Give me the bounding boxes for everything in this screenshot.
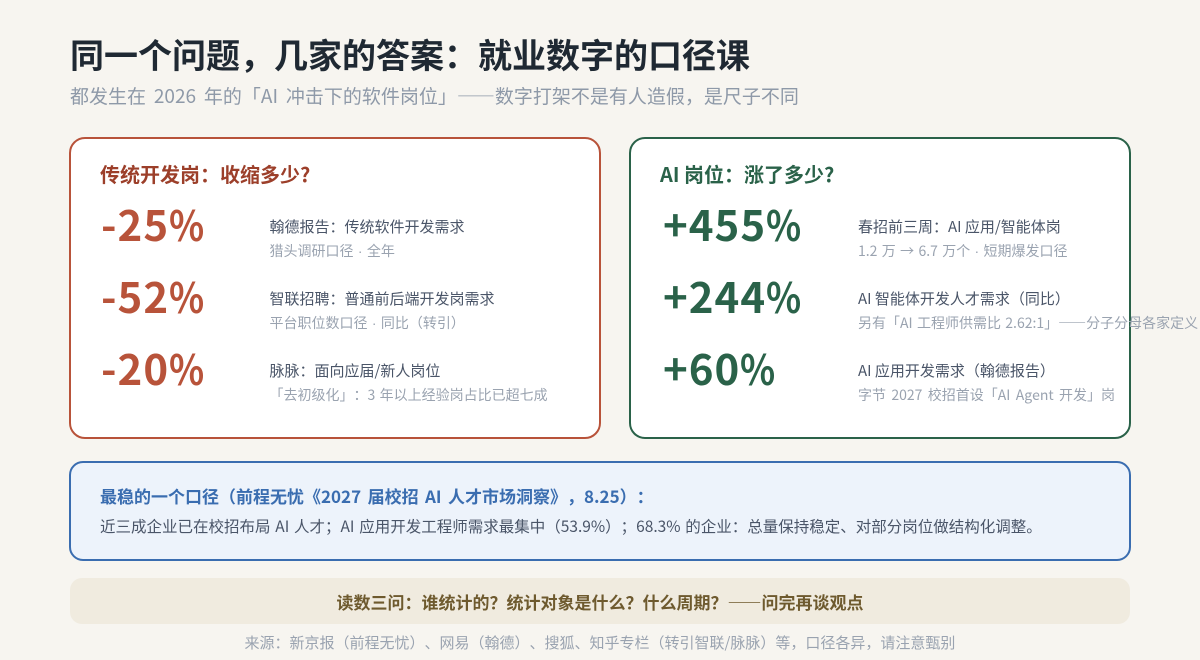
panel heading: traditional: 传统开发岗：收缩多少? (100, 158, 310, 188)
callout: most stable figure (69, 461, 1131, 561)
stat: +455%: +455 (663, 193, 766, 254)
stat: -25%: -25 (101, 193, 169, 254)
note: Maimai: 「去初级化」：3 年以上经验岗占比已超七成 (270, 385, 548, 405)
title: 同一个问题，几家的答案：就业数字的口径课 (70, 29, 750, 78)
note: ByteDance: 字节 2027 校招首设「AI Agent 开发」岗 (858, 385, 1115, 405)
stat: -25%: % (169, 193, 205, 254)
banner text: 读数三问：谁统计的？统计对象是什么？什么周期？——问完再谈观点 (336, 588, 864, 614)
source line: 来源：新京报（前程无忧）、网易（翰德）、搜狐、知乎专栏（转引智联/脉脉）等，口径各异，请注意甄别 (245, 632, 955, 653)
stat: -52%: -52 (101, 265, 169, 326)
panel heading: AI: AI 岗位：涨了多少? (660, 158, 834, 188)
stat: -20%: % (169, 337, 205, 398)
subtitle: 都发生在 2026 年的「AI 冲击下的软件岗位」——数字打架不是有人造假，是尺子不同 (70, 82, 799, 109)
stat: +60%: % (740, 337, 776, 398)
stat: -52% (101, 265, 205, 326)
panel: traditional dev roles (69, 137, 601, 439)
stat: -52%: % (169, 265, 205, 326)
stat: +455%: % (766, 193, 802, 254)
panel: AI roles (629, 137, 1131, 439)
description: AI app development: AI 应用开发需求（翰德报告） (858, 360, 1055, 381)
banner: three questions (70, 578, 1130, 624)
callout body: 近三成企业已在校招布局 AI 人才；AI 应用开发工程师需求最集中（53.9%）；68.3% 的企业：总量保持稳定、对部分岗位做结构化调整。 (100, 515, 1042, 537)
note: Zhaopin: 平台职位数口径 · 同比（转引） (270, 313, 465, 333)
description: Hays: 翰德报告：传统软件开发需求 (270, 216, 465, 237)
description: Maimai: 脉脉：面向应届/新人岗位 (270, 360, 440, 381)
note: spring hiring: 1.2 万 → 6.7 万个 · 短期爆发口径 (858, 241, 1068, 261)
note: supply demand ratio: 另有「AI 工程师供需比 2.62:1」——分子分母各家定义 (858, 313, 1198, 333)
stat: -20%: -20 (101, 337, 169, 398)
callout heading: 最稳的一个口径（前程无忧《2027 届校招 AI 人才市场洞察》，8.25）： (100, 482, 654, 508)
stat: +60% (663, 337, 776, 398)
note: Hays: 猎头调研口径 · 全年 (270, 241, 395, 261)
stat: +60%: +60 (663, 337, 740, 398)
description: spring hiring: 春招前三周：AI 应用/智能体岗 (858, 216, 1061, 237)
stat: +244%: % (766, 265, 802, 326)
stat: -20% (101, 337, 205, 398)
description: agent developers: AI 智能体开发人才需求（同比） (858, 288, 1070, 309)
stat: -25% (101, 193, 205, 254)
description: Zhaopin: 智联招聘：普通前后端开发岗需求 (270, 288, 495, 309)
stat: +244%: +244 (663, 265, 766, 326)
